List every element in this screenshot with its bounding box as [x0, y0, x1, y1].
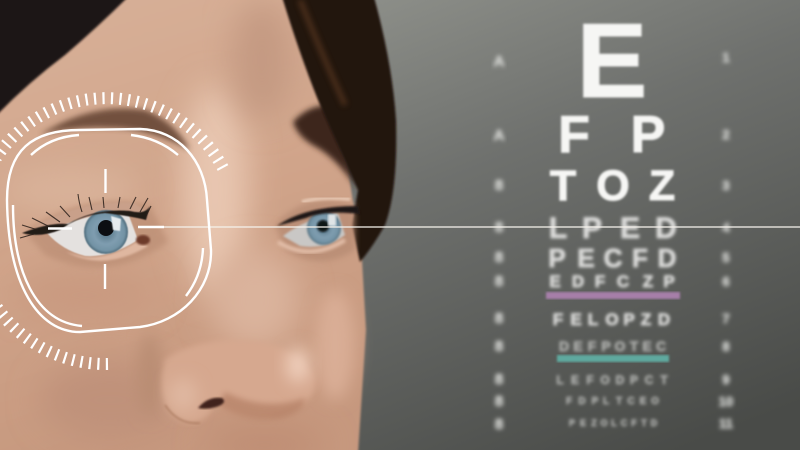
- chart left column: 8: [495, 371, 503, 388]
- chart small letters: T: [660, 373, 668, 387]
- frame inner arc: left side: [13, 205, 82, 326]
- right iris: [307, 211, 341, 245]
- catchlight: [111, 216, 121, 231]
- chart large letters: O: [596, 162, 630, 210]
- chart right column: [719, 50, 733, 431]
- chart middle letters: C: [604, 243, 623, 273]
- eye socket shadow: [25, 201, 168, 267]
- chart small letters: T: [630, 338, 639, 354]
- chart small letters: E: [640, 396, 647, 407]
- right lower lid: [278, 240, 345, 252]
- chart small letters: F: [631, 418, 637, 428]
- chart middle letters: P: [663, 272, 675, 291]
- chart left column: [494, 53, 505, 433]
- chart small letters: F: [586, 373, 594, 387]
- chart left column: 8: [495, 219, 503, 236]
- chart middle letters: P: [623, 310, 635, 329]
- chart middle letters: F: [553, 310, 563, 329]
- chart right column: 7: [722, 311, 730, 326]
- chart right column: 6: [722, 274, 730, 289]
- chart middle letters: D: [572, 272, 584, 291]
- chart small letters: C: [627, 396, 635, 407]
- chart middle letters: O: [605, 310, 619, 329]
- chart small letters: O: [600, 418, 608, 428]
- eyelid fold: [35, 202, 150, 232]
- tear duct: [136, 235, 150, 245]
- left hair: [0, 0, 135, 122]
- chart small letters: F: [588, 338, 597, 354]
- chart middle letters: Z: [641, 310, 651, 329]
- lower lid: [66, 241, 148, 261]
- chart large letters: T: [550, 162, 576, 210]
- chart small letters: Z: [591, 418, 597, 428]
- lower tick ring: [0, 303, 108, 364]
- chart small letters: E: [573, 338, 583, 354]
- chart left column: 8: [495, 393, 503, 410]
- right sclera: [283, 213, 345, 247]
- hair highlight: [300, 0, 345, 105]
- chart right column: 5: [722, 250, 730, 265]
- chart middle letters: L: [549, 212, 567, 245]
- chart small letters: T: [641, 418, 647, 428]
- left eyebrow: [40, 108, 190, 150]
- chart right column: 9: [722, 372, 730, 387]
- chart middle letters: D: [658, 310, 670, 329]
- chart left column: 8: [495, 416, 503, 433]
- chart small letters: O: [651, 396, 659, 407]
- chart small letters: P: [569, 418, 575, 428]
- chart left column: 8: [495, 310, 503, 327]
- left eye: [20, 194, 168, 267]
- upper lash band: [22, 206, 150, 235]
- chart left column: 8: [495, 177, 503, 194]
- chart small letters: E: [580, 418, 586, 428]
- chart right column: 4: [722, 220, 730, 235]
- sclera: [47, 213, 138, 256]
- chart large letters: Z: [649, 162, 675, 210]
- chart middle letters: [548, 212, 677, 329]
- chart small letters: L: [603, 396, 609, 407]
- chart right column: 1: [722, 50, 730, 65]
- chart small letters: D: [651, 418, 658, 428]
- chart small letters: P: [592, 396, 599, 407]
- chart large letters: E: [577, 2, 647, 120]
- purple chart bar: [546, 292, 680, 299]
- chart small letters: L: [556, 373, 564, 387]
- chart right column: 8: [722, 339, 730, 354]
- chart small letters: E: [571, 373, 579, 387]
- frame inner arc: top right: [131, 135, 178, 155]
- chart small letters: D: [578, 396, 586, 407]
- chart right column: 11: [719, 416, 733, 431]
- chart large letters: [550, 2, 675, 210]
- chart middle letters: E: [570, 310, 582, 329]
- chart large letters: P: [631, 106, 665, 164]
- face: [0, 0, 396, 450]
- chart middle letters: E: [577, 243, 595, 273]
- chart right column: 3: [722, 178, 730, 193]
- chart middle letters: Z: [643, 272, 653, 291]
- lash strokes: [20, 194, 151, 238]
- rounded frame: [7, 129, 211, 332]
- right catchlight: [328, 214, 336, 226]
- nose: [162, 340, 316, 423]
- chart small letters: P: [630, 373, 638, 387]
- chart large letters: F: [558, 106, 590, 164]
- chart middle letters: P: [548, 243, 566, 273]
- chart left column: A: [494, 53, 505, 70]
- eye chart: [494, 2, 733, 433]
- chart small letters: E: [642, 338, 652, 354]
- chart small letters: F: [566, 396, 572, 407]
- chart small letters: D: [616, 373, 625, 387]
- chart middle letters: L: [588, 310, 598, 329]
- chart right column: 2: [722, 127, 730, 142]
- chart middle letters: D: [658, 243, 676, 273]
- chart middle letters: D: [655, 212, 677, 245]
- chart left column: A: [494, 127, 505, 144]
- chart right column: 10: [719, 394, 733, 409]
- chart middle letters: E: [549, 272, 561, 291]
- iris: [84, 210, 128, 254]
- chart left column: 8: [495, 338, 503, 355]
- right eyebrow: [293, 105, 358, 190]
- chart middle letters: E: [620, 212, 640, 245]
- chart small letters: O: [615, 338, 626, 354]
- frame inner arc: top left: [31, 135, 79, 155]
- scan overlay: [0, 98, 223, 364]
- right lid highlight: [302, 198, 350, 202]
- chart small letters: L: [611, 418, 617, 428]
- teal chart bar: [557, 355, 669, 362]
- upper tick ring: [0, 98, 223, 168]
- pupil: [98, 220, 114, 236]
- frame inner arc: right side: [186, 248, 203, 296]
- crosshair: [48, 169, 164, 289]
- chart small letters: P: [601, 338, 611, 354]
- skin shading: [0, 0, 355, 450]
- right pupil: [317, 220, 329, 232]
- right hair: [280, 0, 396, 262]
- chart small letters: D: [559, 338, 569, 354]
- chart left column: 8: [495, 273, 503, 290]
- chart small letters: O: [600, 373, 610, 387]
- chart middle letters: F: [632, 243, 648, 273]
- chart small letters: C: [621, 418, 628, 428]
- chart small letters: C: [645, 373, 654, 387]
- right eye socket: [275, 200, 355, 261]
- right eye: [275, 198, 360, 261]
- chart middle letters: F: [595, 272, 605, 291]
- chart small letters: [556, 338, 668, 428]
- skin base: [0, 0, 366, 450]
- chart small letters: C: [656, 338, 666, 354]
- chart small letters: T: [616, 396, 622, 407]
- chart middle letters: P: [582, 212, 602, 245]
- chart middle letters: C: [617, 272, 629, 291]
- right upper lashes: [277, 206, 360, 226]
- horizontal scan line: [164, 226, 800, 228]
- chart left column: 8: [495, 249, 503, 266]
